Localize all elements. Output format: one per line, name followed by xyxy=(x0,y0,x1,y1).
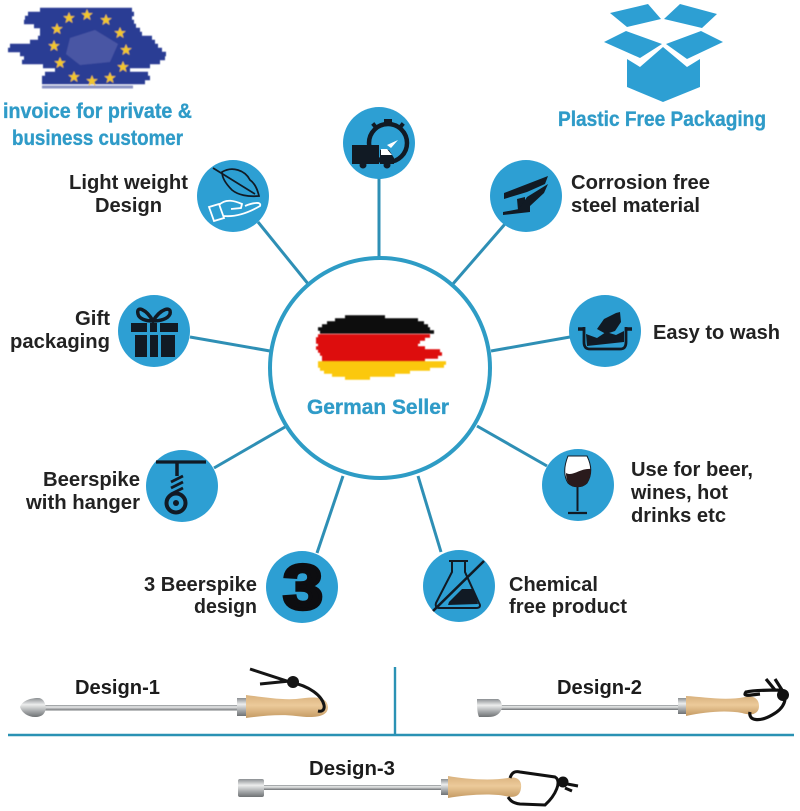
icon: spike with cylinder head xyxy=(238,772,578,805)
node: wine drinks xyxy=(542,449,753,527)
icon: wine glass xyxy=(565,456,591,513)
icon: stopwatch and truck xyxy=(352,119,407,168)
design 2 label: Design-2 xyxy=(557,677,642,699)
icon: feather over hand xyxy=(209,168,260,221)
icon: open box xyxy=(604,4,723,102)
German seller label: German Seller xyxy=(307,396,449,419)
label: beerspike: Beerspike xyxy=(43,469,140,491)
icon: wash basin xyxy=(578,312,632,349)
connector lines xyxy=(190,178,570,553)
node: hanger xyxy=(25,450,218,522)
panel: design 1 spike xyxy=(20,669,328,718)
icon: gift box xyxy=(131,309,178,357)
panel: central German seller circle xyxy=(270,258,490,478)
node: fast delivery xyxy=(343,107,415,179)
icon: spike with cup head xyxy=(477,679,789,720)
node: easy to wash xyxy=(569,295,780,367)
node: gift packaging xyxy=(10,295,190,367)
label: with hanger: with hanger xyxy=(25,492,140,514)
icon: crossed flask xyxy=(433,561,484,611)
icon: number 3: 3 xyxy=(283,553,323,623)
label: gift: Gift xyxy=(75,308,110,330)
panel: plastic free packaging xyxy=(558,4,766,131)
panel: EU invoice badge xyxy=(3,9,192,150)
icon: pulley hanger xyxy=(156,462,206,512)
label: packaging: packaging xyxy=(10,331,110,353)
section dividers xyxy=(8,667,794,735)
label: wines hot: wines, hot xyxy=(630,482,728,504)
label: design: design xyxy=(194,596,257,618)
label: free product: free product xyxy=(509,596,627,618)
node: three designs xyxy=(144,551,338,623)
icon: EU brush flag xyxy=(8,9,166,87)
node: corrosion free steel xyxy=(490,160,710,232)
label: easy to wash: Easy to wash xyxy=(653,322,780,344)
invoice heading: invoice for private & xyxy=(3,100,192,123)
design 1 label: Design-1 xyxy=(75,677,160,699)
label: corrosion free: Corrosion free xyxy=(571,172,710,194)
label: chemical: Chemical xyxy=(509,574,598,596)
panel: design 3 spike xyxy=(238,758,578,805)
design 3 label: Design-3 xyxy=(309,758,395,780)
invoice heading second line: business customer xyxy=(12,127,183,150)
icon: spike with rounded head xyxy=(20,669,328,718)
icon: steel beam xyxy=(503,176,548,215)
label: steel material: steel material xyxy=(571,195,700,217)
label: use for beer: Use for beer, xyxy=(631,459,753,481)
label: drinks etc: drinks etc xyxy=(631,505,726,527)
icon: German brush flag xyxy=(316,317,446,378)
packaging heading: Plastic Free Packaging xyxy=(558,108,766,131)
label: design: Design xyxy=(95,195,162,217)
node: light weight design xyxy=(69,160,269,232)
label: light weight: Light weight xyxy=(69,172,188,194)
panel: design 2 spike xyxy=(477,677,789,720)
label: 3 beerspike: 3 Beerspike xyxy=(144,574,257,596)
node: chemical free xyxy=(423,550,627,622)
